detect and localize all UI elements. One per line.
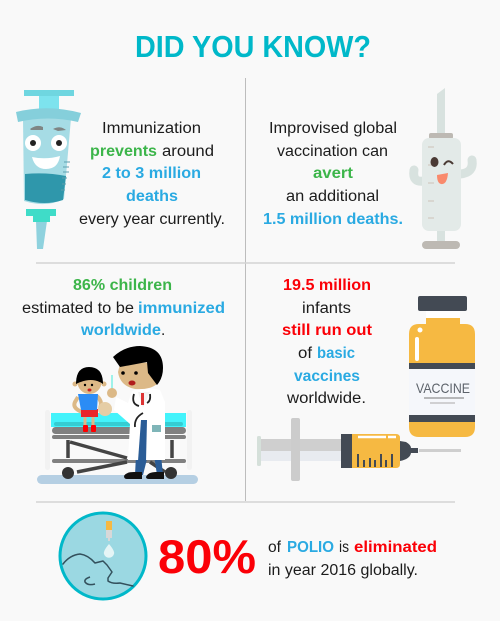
text: 19.5 million: worldwide. [286,390,366,407]
text: improvised vaccination: vaccination can [277,143,388,160]
child [72,367,106,432]
panel: polio [60,513,437,599]
text: 19.5 million: vaccines [294,368,360,385]
panel: infants run out of vaccines [257,277,475,481]
text: 86% children: . [161,322,165,339]
text: improvised vaccination: an additional [286,188,379,205]
text: 86% children: 86% children [73,277,172,294]
text: 19.5 million: of [298,345,313,362]
icon: smiling blue syringe [16,90,81,249]
text: immunization: prevents [90,143,157,160]
icon: winking grey syringe [414,88,472,249]
text: improvised vaccination: Improvised global [269,120,397,137]
text: polio eliminated: is [339,539,349,556]
text: immunization: deaths [126,188,178,205]
stat: 80%: 80% [158,530,256,583]
text: 19.5 million: basic [317,345,355,362]
text: 86% children: estimated to be [22,300,134,317]
text: polio eliminated [268,539,437,579]
text: immunization [79,120,225,228]
text: improvised vaccination: avert [313,165,353,182]
text: polio eliminated: eliminated [354,539,437,556]
text: 19.5 million: infants [302,300,351,317]
text: immunization: every year currently. [79,211,225,228]
text: polio eliminated: of [268,539,282,556]
illustration: doctor and child on a bed [37,346,198,484]
text: immunization: Immunization [102,120,201,137]
text: 86% children: worldwide [80,322,161,339]
text: 86% children: immunized [138,300,225,317]
text: 19.5 million: still run out [282,322,372,339]
text: 19.5 million: 19.5 million [283,277,371,294]
text: polio eliminated: POLIO [287,539,334,556]
text: 19.5 million [282,277,372,407]
icon: large syringe [257,418,461,481]
icon: vaccine vial: VACCINE [416,380,470,396]
doctor [98,346,165,479]
icon: vaccine vial [409,296,475,437]
text: polio eliminated: in year 2016 globally. [268,562,418,579]
icon: oral polio drop [60,513,146,599]
panel: children immunized [22,277,225,484]
panel: improved vaccination [263,88,472,249]
text: immunization: 2 to 3 million [102,165,201,182]
text: immunization: around [162,143,214,160]
text: 86% children [22,277,225,339]
panel: immunization prevents deaths [16,90,225,249]
title: DID YOU KNOW? [135,29,371,64]
text: improvised vaccination: 1.5 million deaths. [263,211,403,228]
text: improvised vaccination [263,120,403,228]
